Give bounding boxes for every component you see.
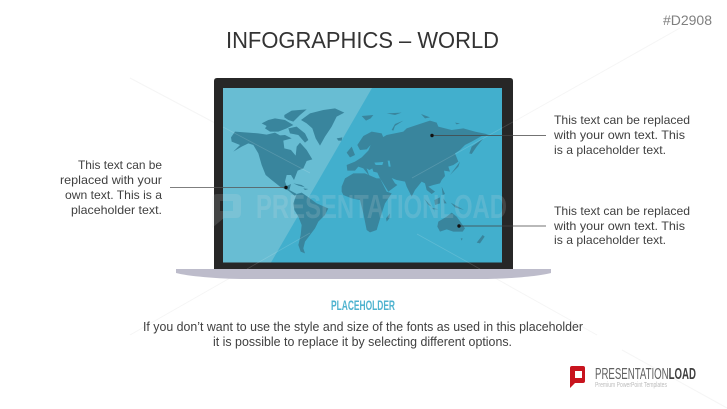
Greenland	[301, 108, 344, 146]
text: bottom right callout: with your own text. This	[553, 219, 685, 233]
text: top right callout: This text can be replaced	[554, 113, 690, 127]
text: top right callout: with your own text. This	[553, 128, 685, 142]
north polar landmasses	[231, 108, 344, 180]
title: INFOGRAPHICS – WORLD	[226, 27, 499, 53]
Madagascar	[386, 213, 390, 222]
British Isles	[347, 147, 355, 157]
Tasmania and New Zealand	[461, 235, 485, 243]
Japan	[450, 162, 460, 175]
Southeast Asian islands	[424, 187, 464, 210]
text: left callout: placeholder text.	[71, 203, 162, 217]
watermark: PRESENTATIONLOAD	[256, 188, 507, 225]
Arctic islands	[262, 109, 308, 143]
text: top right callout: is a placeholder text.	[554, 143, 666, 157]
Africa and Oceania	[342, 173, 485, 243]
Mexico	[265, 170, 297, 196]
central America and South America	[265, 170, 328, 253]
body text: If you don’t want to use the style and size of the fonts as used in this placeholder	[143, 320, 583, 334]
text: bottom right callout	[553, 204, 690, 247]
text: left callout	[60, 158, 162, 217]
Africa	[342, 173, 392, 232]
text: left callout: This text can be	[78, 158, 162, 172]
ID tag: #D2908	[663, 12, 712, 28]
text: bottom right callout: is a placeholder text.	[554, 233, 666, 247]
Arctic islands	[362, 113, 460, 131]
world map	[231, 108, 488, 253]
Eurasia	[347, 121, 488, 197]
logo tagline: Premium PowerPoint Templates	[595, 382, 667, 389]
text: left callout: replaced with your	[60, 173, 162, 187]
watermark	[212, 188, 507, 228]
laptop base	[176, 269, 551, 279]
logo icon	[570, 366, 585, 388]
leader: bottom right	[457, 224, 546, 228]
laptop	[176, 78, 551, 279]
Iceland	[337, 137, 342, 141]
Caribbean	[293, 183, 308, 190]
body text: it is possible to replace it by selecting different options.	[213, 335, 512, 349]
logo	[570, 366, 696, 389]
Australia	[437, 213, 465, 232]
South America	[293, 193, 328, 253]
screen	[223, 88, 502, 262]
North America	[231, 132, 312, 180]
subheading: PLACEHOLDER	[331, 297, 395, 313]
text: top right callout	[553, 113, 690, 157]
body text	[143, 320, 583, 349]
text: left callout: own text. This is a	[65, 188, 162, 202]
laptop lid	[214, 78, 513, 269]
screen glare	[223, 88, 372, 262]
Black Sea and Caspian	[374, 161, 391, 167]
Kamchatka	[469, 138, 483, 154]
leader: top right	[430, 134, 546, 137]
leader: left	[170, 186, 288, 189]
text: bottom right callout: This text can be replaced	[554, 204, 690, 218]
Eurasia and northern islands	[347, 113, 488, 197]
logo wordmark: PRESENTATIONLOAD	[595, 366, 696, 383]
